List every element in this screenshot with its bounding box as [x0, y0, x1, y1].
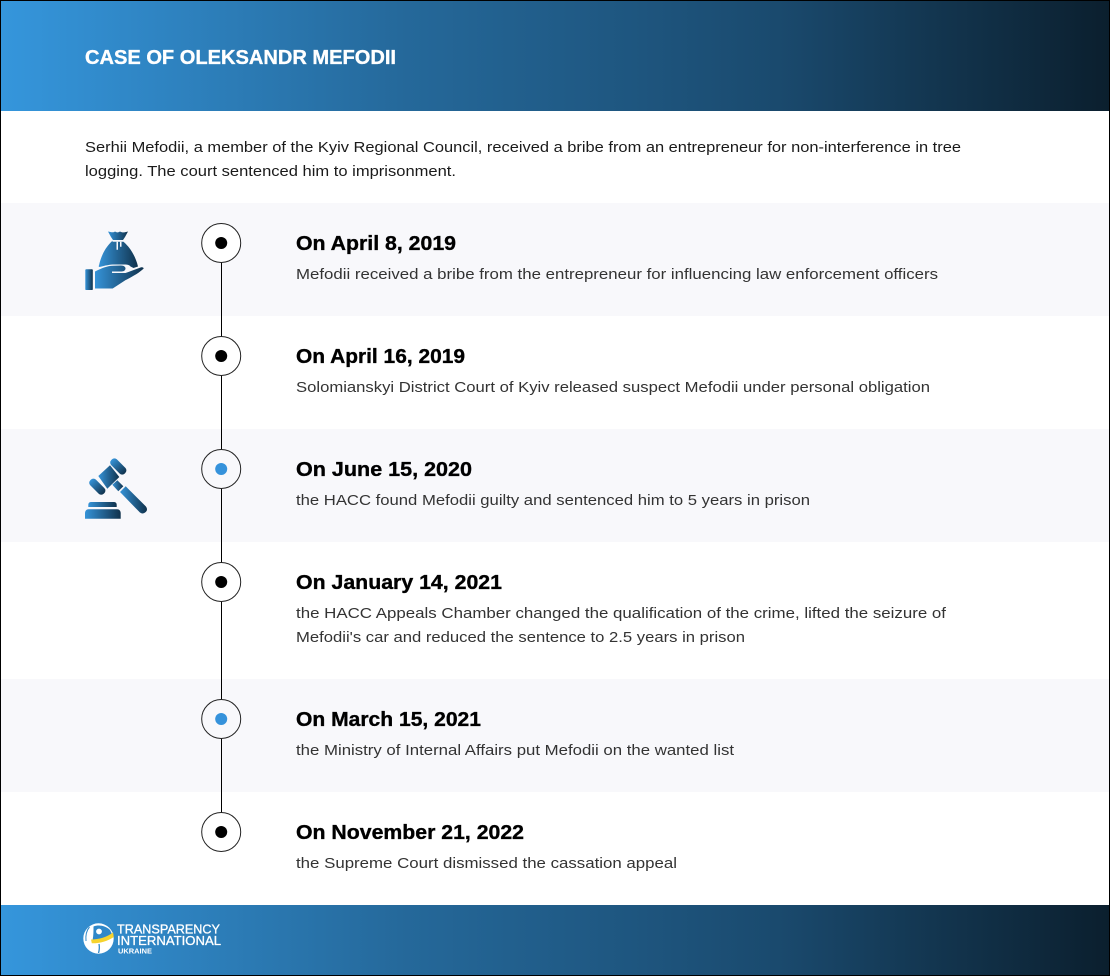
- logo text: UKRAINE: [118, 948, 152, 956]
- timeline axis: [221, 243, 222, 832]
- logo text: [117, 922, 221, 956]
- description: the HACC Appeals Chamber changed the qualification of the crime, lifted the seizure of: [296, 605, 947, 622]
- event 6: [202, 812, 677, 872]
- date: On March 15, 2021: [296, 709, 481, 731]
- logo emblem: [83, 923, 114, 954]
- event 2: [202, 336, 930, 396]
- intro text: Serhii Mefodii, a member of the Kyiv Regional Council, received a bribe from an entrepreneur for non-interference in tree: [85, 139, 961, 156]
- logo text: INTERNATIONAL: [117, 933, 221, 948]
- event 3: [202, 450, 810, 509]
- sleeve: [85, 269, 93, 290]
- intro text: logging. The court sentenced him to imprisonment.: [85, 163, 456, 180]
- date: On April 8, 2019: [296, 233, 456, 255]
- marker: [202, 336, 241, 376]
- description: the Ministry of Internal Affairs put Mefodii on the wanted list: [296, 742, 735, 759]
- description: the Supreme Court dismissed the cassation appeal: [296, 855, 677, 872]
- icon: money bag on hand: [85, 232, 144, 290]
- logo: Transparency International Ukraine: [83, 922, 221, 956]
- marker: [202, 812, 241, 852]
- icon: judge gavel: [85, 457, 147, 519]
- footer band: [1, 905, 1109, 975]
- marker: [202, 700, 241, 738]
- date: On November 21, 2022: [296, 822, 524, 844]
- description: the HACC found Mefodii guilty and sentenced him to 5 years in prison: [296, 492, 810, 509]
- description: Mefodii's car and reduced the sentence to 2.5 years in prison: [296, 629, 745, 646]
- event 1: [202, 224, 938, 283]
- description: Mefodii received a bribe from the entrepreneur for influencing law enforcement officers: [296, 266, 938, 283]
- marker: [202, 450, 241, 488]
- description: Solomianskyi District Court of Kyiv released suspect Mefodii under personal obligation: [296, 379, 930, 396]
- marker: [202, 562, 241, 602]
- hand: [95, 266, 144, 288]
- row backgrounds: [1, 203, 1109, 792]
- date: On January 14, 2021: [296, 572, 502, 594]
- header band: [1, 1, 1109, 111]
- logo text: TRANSPARENCY: [117, 922, 220, 936]
- intro text: [85, 139, 961, 180]
- description: [296, 605, 947, 646]
- date: On April 16, 2019: [296, 346, 465, 368]
- date: On June 15, 2020: [296, 459, 472, 481]
- event 4: [202, 562, 947, 646]
- title: CASE OF OLEKSANDR MEFODII: [85, 47, 396, 69]
- marker: [202, 224, 241, 262]
- event 5: [202, 700, 735, 759]
